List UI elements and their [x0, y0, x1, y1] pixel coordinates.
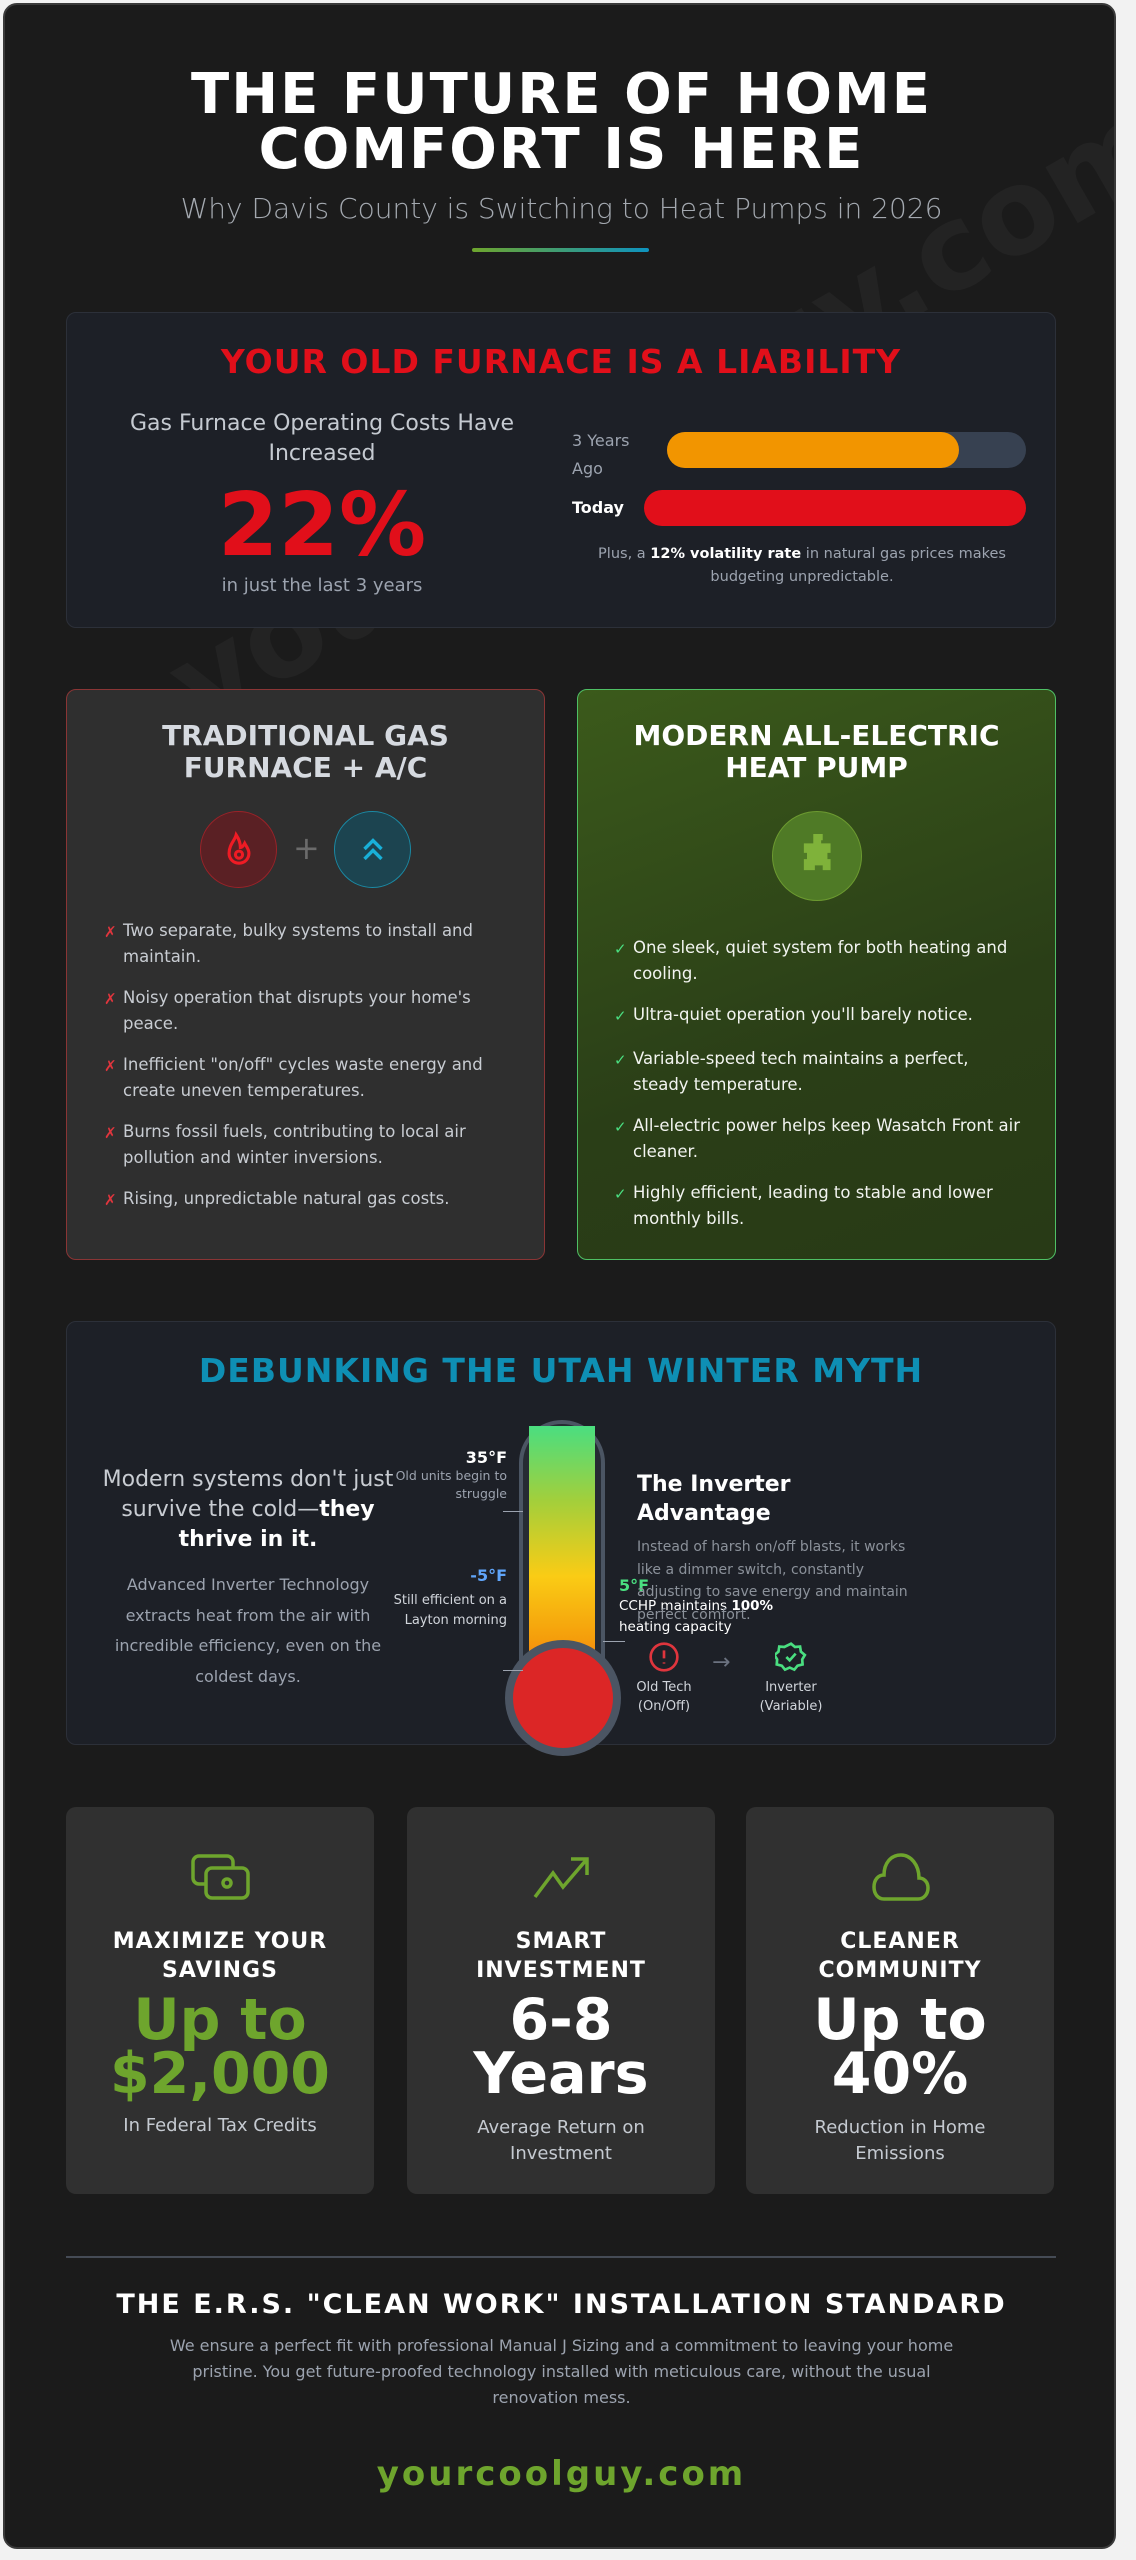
label: -5F: Layton morning — [405, 1613, 507, 1628]
panel: traditional system: Rising, unpredictable natural gas costs. — [123, 1189, 450, 1208]
panel: traditional system: ✗ — [104, 990, 117, 1008]
label: 35F: Old units begin to — [396, 1468, 507, 1483]
footer: website: yourcoolguy.com — [377, 2454, 746, 2494]
subtitle: Why Davis County is Switching to Heat Pumps in 2026 — [181, 192, 942, 225]
icons: old tech to inverter: Old Tech — [636, 1680, 692, 1695]
note: volatility — [598, 546, 1006, 585]
heading: heat pump: MODERN ALL-ELECTRIC — [633, 719, 1000, 752]
text: clean work description: We ensure a perfect fit with professional Manual J Sizing and a commitment to leaving your home pristine. You get future-proofed technology installed with meticulous care, without the usual renovation mess. — [170, 2336, 953, 2407]
card: savings: MAXIMIZE YOUR — [113, 1929, 327, 1954]
card: investment: INVESTMENT — [476, 1958, 646, 1983]
panel: traditional system: ✗ — [104, 923, 117, 941]
list: drawbacks — [104, 921, 483, 1209]
label: 5F: CCHP maintains 100% — [619, 1598, 773, 1614]
stat: 22%: Gas Furnace Operating Costs Have — [130, 411, 514, 436]
panel: heat pump: All-electric power helps keep Wasatch Front air cleaner. — [633, 1116, 1020, 1161]
stat: 22%: Increased — [268, 441, 376, 466]
bar chart: cost comparison — [572, 431, 1026, 585]
title divider — [472, 248, 649, 252]
icons: old tech to inverter: Inverter — [765, 1680, 817, 1695]
card: investment: SMART — [516, 1929, 606, 1954]
panel: heat pump: Highly efficient, leading to stable and lower monthly bills. — [633, 1183, 993, 1228]
icons: flame + AC: + — [293, 829, 320, 867]
stat: 22%: in just the last 3 years — [222, 575, 422, 596]
text: inverter tech: Advanced Inverter Technology extracts heat from the air with incredible efficiency, even on the coldest days. — [115, 1575, 381, 1686]
chart: thermometer — [394, 1420, 773, 1756]
bar chart: cost comparison: 3 Years — [572, 431, 629, 450]
panel: traditional system: Inefficient "on/off" cycles waste energy and create uneven temperatures. — [123, 1055, 483, 1100]
icons: old tech to inverter: → — [712, 1650, 730, 1675]
card: investment: Average Return on — [477, 2117, 645, 2138]
card: savings: $2,000 — [110, 2041, 330, 2107]
label: -5F: -5°F — [470, 1566, 507, 1585]
panel: traditional system: ✗ — [104, 1057, 117, 1075]
title: COMFORT IS HERE — [259, 117, 864, 182]
card: investment: Investment — [510, 2143, 612, 2164]
card: investment: Years — [473, 2041, 649, 2107]
heading: traditional: FURNACE + A/C — [184, 751, 427, 784]
heading: clean work standard: THE E.R.S. "CLEAN WORK" INSTALLATION STANDARD — [116, 2289, 1007, 2320]
label: 35F: struggle — [455, 1486, 507, 1501]
panel: traditional system: ✗ — [104, 1124, 117, 1142]
heading: traditional: TRADITIONAL GAS — [162, 719, 449, 752]
heading: traditional — [162, 719, 449, 784]
heading: heat pump: HEAT PUMP — [725, 751, 908, 784]
bar chart: cost comparison: Ago — [572, 459, 603, 478]
text: inverter advantage: Advantage — [637, 1501, 771, 1526]
panel: traditional system — [66, 689, 545, 1260]
note: volatility: budgeting unpredictable. — [710, 569, 894, 585]
card: community: 40% — [832, 2041, 968, 2107]
card: community: Emissions — [855, 2143, 945, 2164]
icon: cloud — [872, 1853, 930, 1901]
card: community: Reduction in Home — [814, 2117, 986, 2138]
card: savings: Up to — [133, 1987, 307, 2053]
stat: 22%: 22% — [218, 474, 426, 576]
bar chart: cost comparison: Today — [572, 498, 624, 517]
label: 5F: 5°F — [619, 1576, 649, 1595]
label: -5F — [394, 1566, 507, 1628]
panel: heat pump: ✓ — [614, 1185, 627, 1203]
panel: traditional system: ✗ — [104, 1191, 117, 1209]
note: volatility: Plus, a 12% volatility rate in natural gas prices makes — [598, 546, 1006, 562]
panel: heat pump: ✓ — [614, 1051, 627, 1069]
panel: heat pump: ✓ — [614, 940, 627, 958]
text: thrive in cold: Modern systems don't just survive the cold—they thrive in it. — [103, 1467, 393, 1552]
card: savings: In Federal Tax Credits — [123, 2115, 317, 2136]
icons: flame + AC — [200, 811, 411, 888]
card: community — [746, 1807, 1054, 2194]
panel: furnace liability — [66, 312, 1056, 628]
panel: winter myth — [66, 1321, 1056, 1745]
panel: heat pump — [577, 689, 1056, 1260]
card: community: COMMUNITY — [818, 1958, 982, 1983]
heading: heat pump — [633, 719, 1000, 784]
label: -5F: Still efficient on a — [394, 1593, 507, 1608]
stat: 22% — [130, 411, 514, 596]
label: 35F — [396, 1448, 507, 1501]
list: benefits — [614, 938, 1020, 1228]
text: inverter advantage: Instead of harsh on/off blasts, it works like a dimmer switch, constantly adjusting to save energy and maintain perfect comfort. — [637, 1539, 908, 1622]
panel: heat pump: Variable-speed tech maintains a perfect, steady temperature. — [633, 1049, 968, 1094]
panel: traditional system: Noisy operation that disrupts your home's peace. — [123, 988, 471, 1033]
heading: winter myth: DEBUNKING THE UTAH WINTER MYTH — [199, 1351, 923, 1390]
panel: heat pump: ✓ — [614, 1007, 627, 1025]
label: 5F: heating capacity — [619, 1619, 732, 1635]
icons: old tech to inverter: (On/Off) — [638, 1699, 690, 1714]
icons: old tech to inverter — [636, 1642, 822, 1714]
text: inverter advantage — [637, 1472, 908, 1622]
panel: heat pump: ✓ — [614, 1118, 627, 1136]
icon: money — [191, 1854, 250, 1900]
panel: traditional system: Two separate, bulky systems to install and maintain. — [123, 921, 473, 966]
card: savings: SAVINGS — [162, 1958, 278, 1983]
panel: traditional system: Burns fossil fuels, contributing to local air pollution and winter inversions. — [123, 1122, 466, 1167]
icon: trend — [534, 1857, 589, 1898]
card: investment: 6-8 — [510, 1987, 612, 2053]
card: community: CLEANER — [840, 1929, 960, 1954]
heading: liability: YOUR OLD FURNACE IS A LIABILITY — [221, 342, 901, 381]
icons: old tech to inverter: (Variable) — [760, 1699, 822, 1714]
panel: heat pump: One sleek, quiet system for both heating and cooling. — [633, 938, 1007, 983]
card: savings — [66, 1807, 374, 2194]
text: inverter advantage: The Inverter — [637, 1472, 790, 1497]
card: community: Up to — [813, 1987, 987, 2053]
title — [191, 62, 932, 182]
label: 35F: 35°F — [466, 1448, 507, 1467]
icon: puzzle — [772, 811, 862, 901]
title: THE FUTURE OF HOME — [191, 62, 932, 127]
card: investment — [407, 1807, 715, 2194]
panel: heat pump: Ultra-quiet operation you'll barely notice. — [633, 1005, 973, 1024]
label: 5F — [619, 1576, 773, 1635]
